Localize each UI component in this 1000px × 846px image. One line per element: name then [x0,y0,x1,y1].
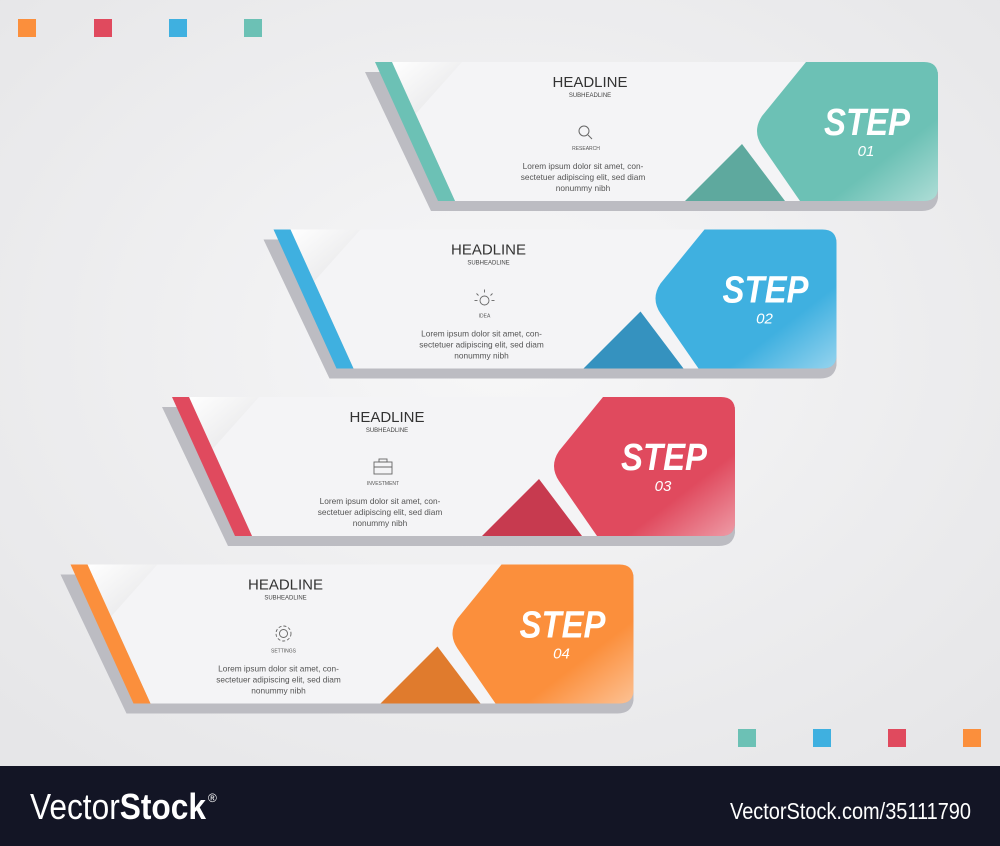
panel: step 04: 04 [553,646,570,662]
heading: HEADLINE [349,409,425,426]
footer bar: ® [208,791,217,805]
panel: step 02: IDEA [479,314,491,320]
icon: briefcase [374,459,392,474]
panel: step 01: RESEARCH [572,146,600,152]
panel: step 02: STEP [722,270,809,312]
panel: step 01: SUBHEADLINE [569,93,611,99]
text block: sectetuer adipiscing elit, sed diam [216,674,341,684]
heading: HEADLINE [248,576,323,594]
icon: bulb [474,290,494,305]
bottom color squares [738,729,981,747]
top color squares [18,19,262,37]
panel: step 03: 03 [655,478,672,495]
panel: step 01: STEP [824,102,911,144]
panel: step 01: 01 [858,143,874,160]
footer bar [0,766,1000,846]
footer bar: VectorStock [30,786,207,827]
text block: Lorem ipsum dolor sit amet, con- [523,161,644,171]
text block: sectetuer adipiscing elit, sed diam [318,507,442,517]
footer bar: VectorStock.com/35111790 [730,798,971,824]
heading: HEADLINE [552,74,628,91]
panel: step 04: SUBHEADLINE [264,596,307,602]
panel: step 03: STEP [621,437,708,479]
icon: magnifier [579,126,592,139]
panel: step 04: SETTINGS [271,648,297,654]
text block: sectetuer adipiscing elit, sed diam [521,172,645,182]
panel: step 04 [60,564,634,714]
text block: sectetuer adipiscing elit, sed diam [419,340,544,350]
text block: nonummy nibh [556,183,611,193]
text block: Lorem ipsum dolor sit amet, con- [218,664,339,674]
panel: step 03: SUBHEADLINE [366,428,408,434]
text block: nonummy nibh [353,518,408,528]
panel: step 04: STEP [520,604,606,646]
heading: HEADLINE [451,242,526,258]
panel: step 02: 02 [756,310,773,328]
icon: gear [276,626,291,641]
panel: step 01 [365,62,938,211]
panel: step 03 [162,397,735,546]
panel: step 02: SUBHEADLINE [467,260,510,266]
text block: Lorem ipsum dolor sit amet, con- [421,328,542,338]
text block: nonummy nibh [251,686,306,696]
text block: Lorem ipsum dolor sit amet, con- [320,496,441,506]
panel: step 03: INVESTMENT [367,481,399,487]
text block: nonummy nibh [454,350,509,360]
panel: step 02 [264,230,836,378]
